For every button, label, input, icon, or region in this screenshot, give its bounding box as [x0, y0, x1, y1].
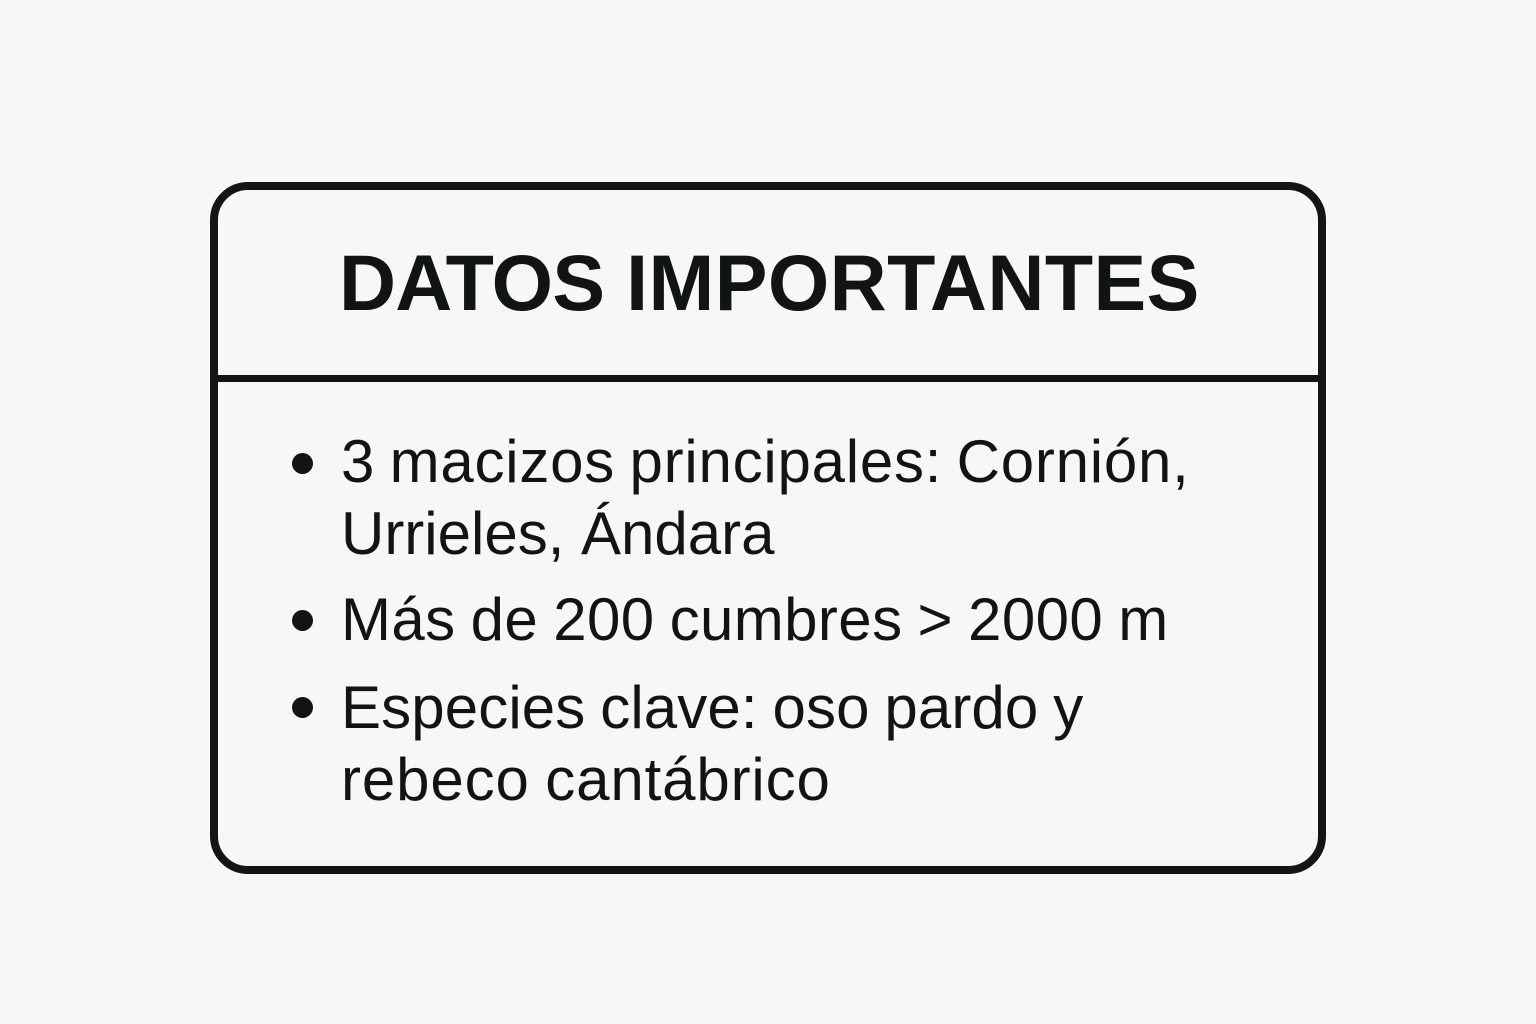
bullet 2 marker	[292, 610, 313, 631]
bullet list	[292, 428, 1190, 813]
bullet 3 marker	[292, 697, 313, 718]
bullet 2 text: Más de 200 cumbres > 2000 m	[341, 586, 1169, 653]
bullet 3 line 1: Especies clave: oso pardo y	[341, 674, 1083, 741]
heading: DATOS IMPORTANTES	[339, 238, 1200, 327]
bullet 3 line 2: rebeco cantábrico	[341, 746, 831, 813]
bullet 1 marker	[292, 453, 313, 474]
divider under heading	[214, 375, 1322, 382]
bullet 1 line 1: 3 macizos principales: Cornión,	[341, 428, 1190, 495]
panel: key facts card	[210, 182, 1326, 874]
bullet 1 line 2: Urrieles, Ándara	[341, 500, 775, 567]
